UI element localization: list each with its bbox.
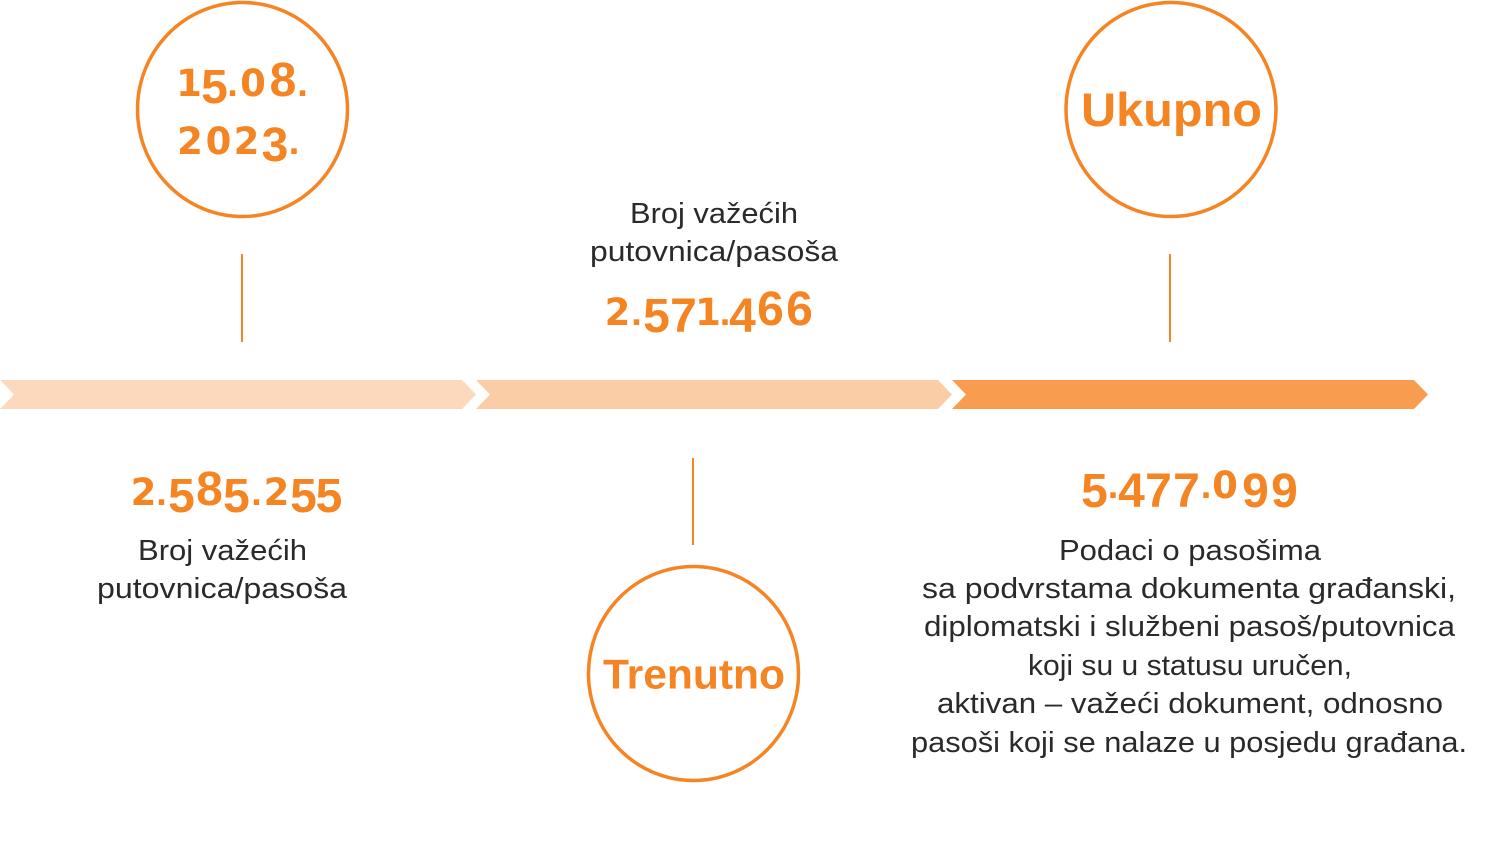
date badge: . [227, 63, 238, 105]
number: date: 5 [316, 470, 342, 523]
label: current passports [590, 198, 839, 268]
number: current: 6 [786, 283, 813, 336]
number: date: 2 [131, 471, 156, 514]
number: current: 4 [729, 290, 756, 343]
number: current: 6 [757, 283, 784, 336]
arrow segment: 15.08.2023 [0, 380, 476, 409]
number: date: . [156, 472, 167, 514]
description: total: sa podvrstama dokumenta građanski, [922, 573, 1456, 605]
current badge [588, 566, 798, 780]
number: total: 9 [1271, 465, 1298, 518]
number: date: 5 [290, 470, 317, 523]
number: current: . [720, 292, 730, 334]
date badge: 0 [240, 62, 266, 105]
date badge: 0 [206, 120, 231, 163]
number: total: 7 [1145, 465, 1172, 518]
description: total [911, 535, 1467, 759]
date badge: 2 [177, 120, 203, 163]
connector: current circle [692, 458, 694, 545]
date badge: 8 [270, 54, 296, 107]
label: current passports: Broj važećih [630, 198, 798, 230]
number: total: 0 [1212, 464, 1238, 507]
date badge: 3 [262, 119, 288, 172]
number: total: 7 [1173, 465, 1200, 518]
number: current [605, 283, 813, 343]
number: date: . [251, 472, 262, 514]
number: total: . [1108, 465, 1118, 507]
number: total: 9 [1242, 465, 1269, 518]
label: current passports: putovnica/pasoša [590, 236, 839, 268]
number: total: . [1201, 465, 1211, 507]
number: current: 2 [605, 291, 630, 334]
number: total [1081, 464, 1298, 518]
number: total: 4 [1118, 465, 1145, 518]
label: date passports: Broj važećih [138, 535, 307, 567]
number: current: . [631, 292, 642, 334]
number: date: 5 [223, 470, 250, 523]
description: total: pasoši koji se nalaze u posjedu građana. [911, 727, 1467, 759]
current badge: Trenutno [603, 650, 785, 698]
date badge: 2 [234, 120, 259, 163]
date badge [138, 2, 348, 216]
number: date [131, 463, 342, 523]
date badge: 5 [201, 61, 228, 114]
description: total: diplomatski i službeni pasoš/putovnica [924, 611, 1456, 643]
label: date passports [97, 535, 348, 605]
number: current: 5 [643, 290, 670, 343]
number: current: 7 [670, 290, 697, 343]
date badge: . [289, 121, 299, 163]
description: total: koji su u statusu uručen, [1028, 650, 1352, 682]
number: date: 2 [264, 471, 289, 514]
date badge: . [297, 63, 308, 105]
connector: total circle [1169, 254, 1171, 342]
description: total: aktivan – važeći dokument, odnosno [937, 688, 1443, 720]
number: total: 5 [1081, 465, 1108, 518]
number: date: 5 [168, 470, 195, 523]
number: current: 1 [695, 291, 721, 334]
arrow segment: total [952, 380, 1428, 409]
label: date passports: putovnica/pasoša [97, 573, 348, 605]
description: total: Podaci o pasošima [1059, 535, 1322, 567]
connector: date circle [241, 254, 243, 342]
date badge: 1 [176, 62, 202, 105]
arrow segment: current [476, 380, 952, 409]
number: date: 8 [196, 463, 223, 516]
total badge [1066, 2, 1276, 216]
total badge: Ukupno [1081, 83, 1262, 136]
